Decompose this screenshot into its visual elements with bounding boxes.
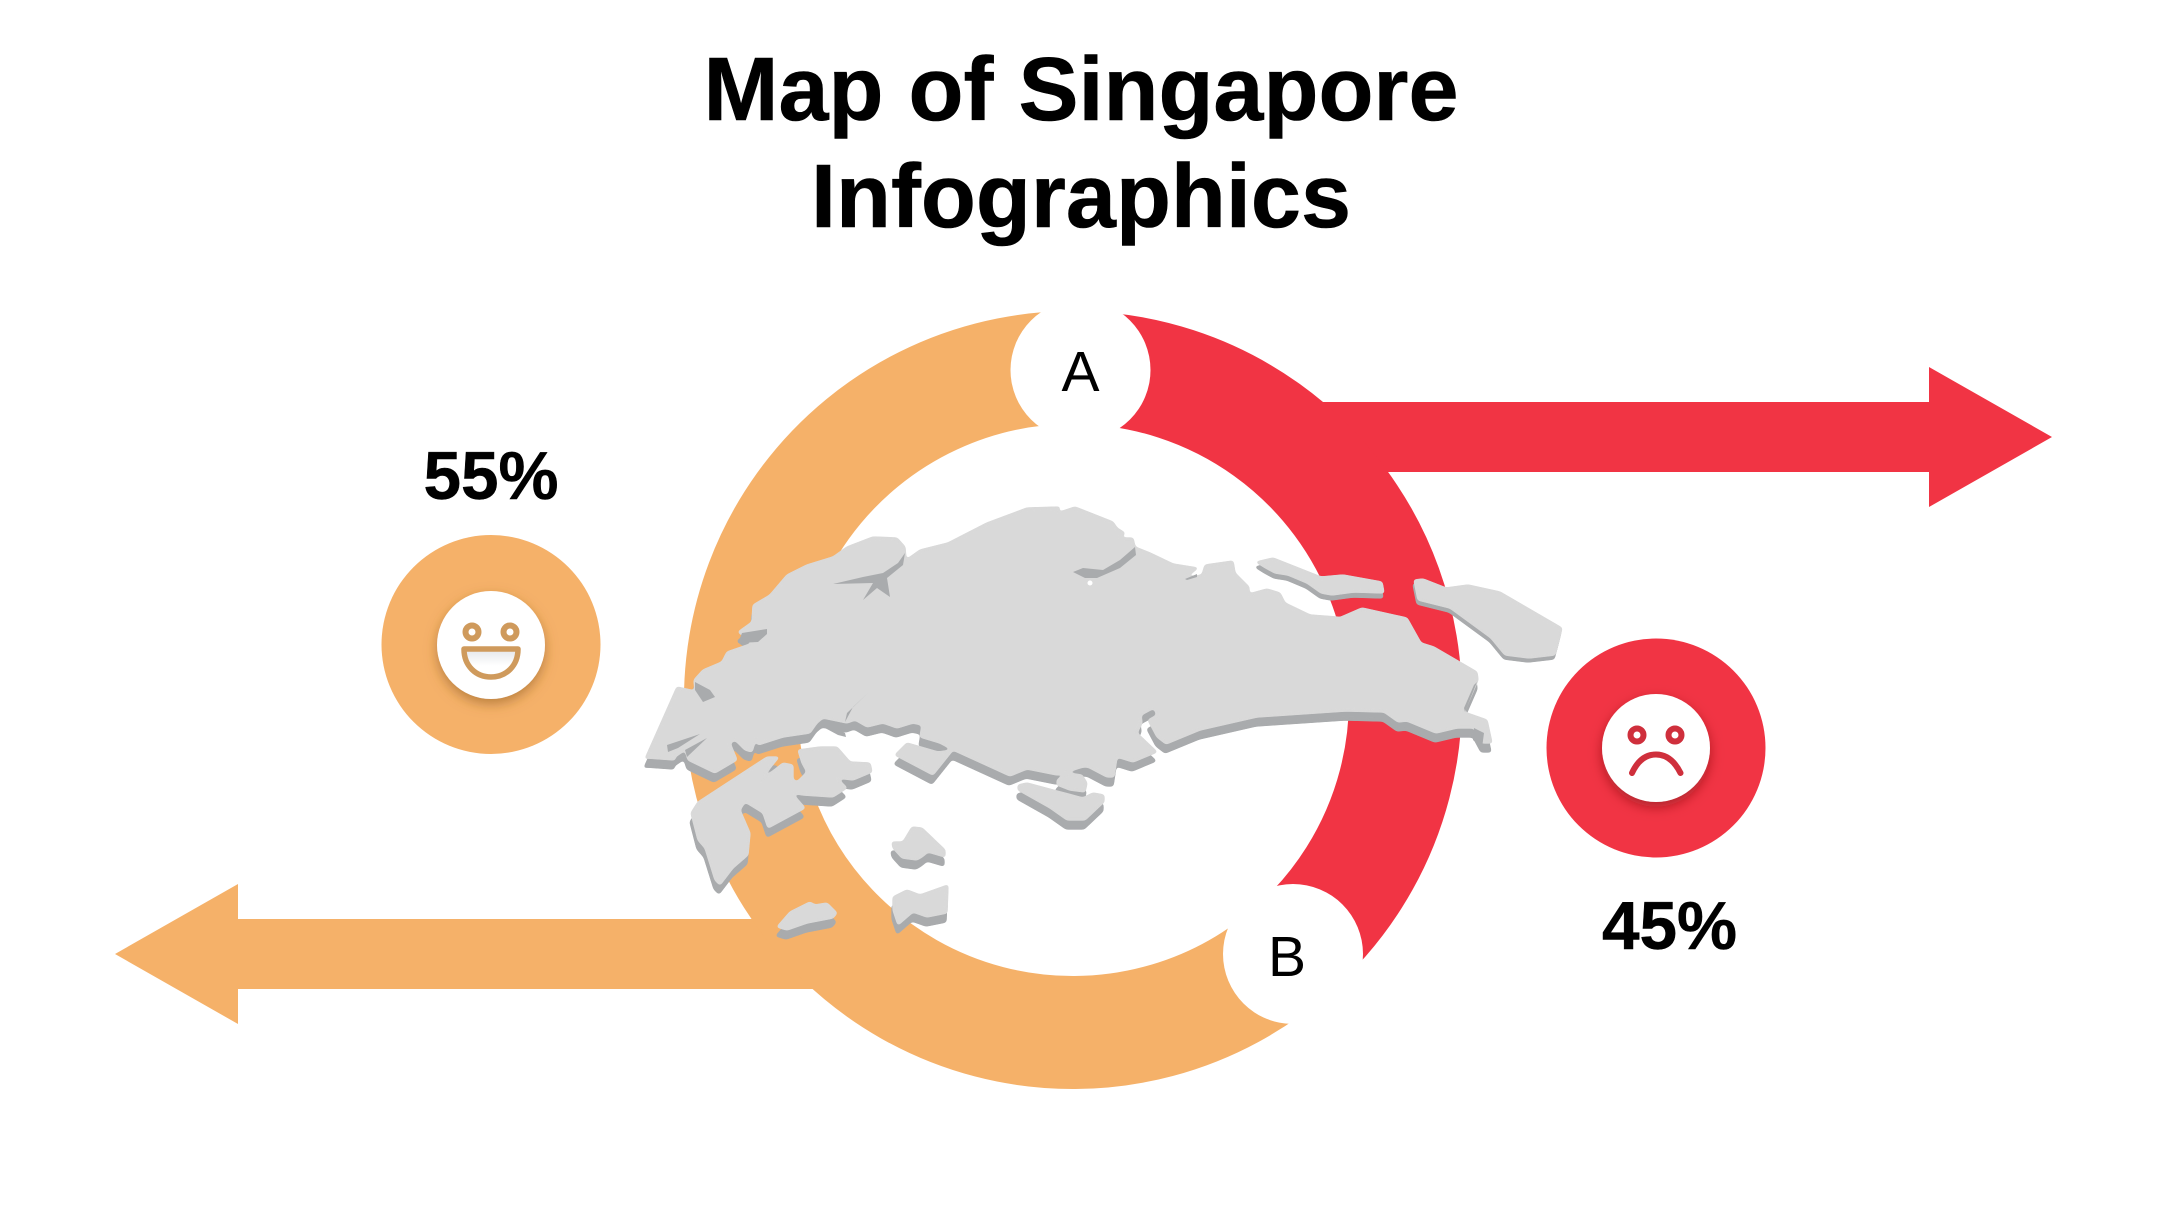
ring segment: red 45%	[1080, 368, 1405, 951]
node B	[1223, 884, 1363, 1024]
title: Infographics	[811, 147, 1351, 247]
title: Map of Singapore	[703, 40, 1459, 140]
map: inlets and rivers	[667, 547, 1484, 757]
badge: orange happy face	[382, 535, 600, 754]
map: extruded shadow	[644, 516, 1561, 939]
arrow: orange pointing left	[115, 884, 830, 1024]
title	[703, 40, 1459, 247]
map: land top surface	[645, 507, 1562, 930]
arrow: red pointing right	[1310, 367, 2052, 507]
stat: 45%: 45%	[1602, 889, 1737, 964]
ring segment: orange 55%	[740, 368, 1291, 1033]
icon: smiling face	[464, 626, 518, 677]
stat: 55%: 55%	[423, 439, 559, 514]
badge: red sad face	[1546, 638, 1766, 858]
node A: A	[1061, 340, 1100, 404]
icon: frowning face	[1630, 728, 1682, 773]
node A	[1010, 300, 1150, 440]
map of Singapore	[644, 507, 1562, 939]
node B: B	[1268, 925, 1306, 989]
